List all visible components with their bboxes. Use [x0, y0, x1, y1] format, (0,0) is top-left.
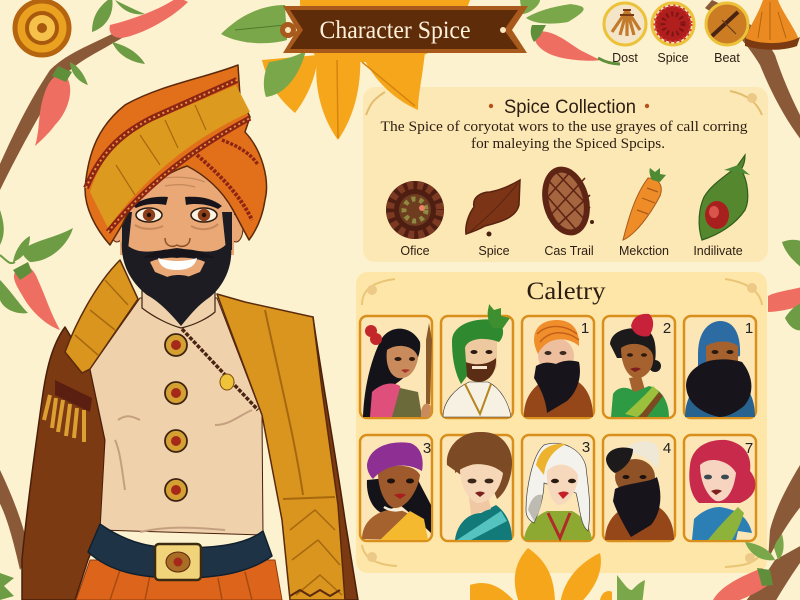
right of banner: chili and leaves	[520, 0, 620, 64]
panel: Caletry gallery	[356, 272, 767, 573]
fringe on arm	[44, 380, 92, 442]
card numbers: 2	[663, 320, 671, 337]
heading: Caletry	[526, 278, 606, 305]
eyes	[136, 208, 162, 222]
card numbers: 7	[745, 440, 753, 457]
panel: Spice Collection	[363, 87, 768, 262]
turban	[85, 65, 266, 245]
card 2: man with green turban	[441, 304, 513, 418]
panel: Spice Collection: for maleying the Spiced Spcips.	[471, 136, 665, 152]
right side chili and leaves	[768, 240, 800, 330]
face	[120, 165, 234, 255]
spice: Indilivate avocado	[693, 155, 750, 258]
description: The Spice of coryotat wors to the use grayes of call corring	[380, 119, 748, 135]
icon: Dost	[604, 3, 646, 65]
spice: Mekction carrot: Mekction	[619, 244, 669, 258]
card 8: woman with white hair and veil	[522, 435, 594, 541]
card 6: woman with purple headwrap	[360, 435, 432, 541]
chain with pendant	[182, 329, 258, 410]
nose	[165, 238, 190, 246]
botanical frame: top left branch, gear and chilies	[0, 0, 188, 190]
card 4: woman with red flower	[603, 314, 675, 418]
spice: Indilivate avocado: Indilivate	[693, 244, 743, 258]
card 3: man with orange turban and black beard	[522, 316, 594, 418]
turban braids	[86, 80, 237, 188]
top flower	[221, 0, 470, 140]
spice: Ofice	[386, 181, 444, 258]
botanical frame: left chili and leaves	[0, 210, 73, 330]
card 7: woman with brown curly hair	[441, 432, 513, 541]
icon: Spice	[652, 3, 694, 65]
card numbers: 1	[581, 320, 589, 337]
icon row: Dost, Spice, Beat	[604, 3, 748, 65]
card numbers: 3	[423, 440, 431, 457]
spice: Spice	[466, 180, 520, 258]
spice: Mekction carrot	[619, 168, 669, 258]
right sleeve	[290, 317, 358, 600]
buttons	[165, 334, 187, 501]
card numbers: 4	[663, 440, 671, 457]
card 10: woman with red hair	[684, 435, 756, 541]
belt	[88, 524, 272, 580]
icon: Spice: Spice	[657, 51, 689, 65]
left sleeve	[22, 327, 105, 600]
lower right branch, chili and leaves	[712, 465, 800, 600]
card numbers: 3	[582, 439, 590, 456]
card numbers: 1	[745, 320, 753, 337]
banner title: Character Spice	[320, 17, 470, 44]
right branch and decorated bag	[705, 0, 800, 145]
main character: turbaned man	[22, 65, 358, 600]
shirt	[90, 298, 263, 535]
spice: Cas Trail	[535, 161, 597, 258]
card numbers	[423, 320, 753, 457]
card 9: man with white turban and black beard	[603, 435, 675, 541]
scarf around neck	[65, 260, 138, 373]
ears	[110, 214, 243, 242]
beard and moustache	[122, 240, 231, 326]
botanical frame: lower left branch and leaf	[0, 470, 30, 600]
icon: Dost: Dost	[612, 51, 638, 65]
turban gold band	[90, 85, 250, 228]
spice: Spice: Spice	[478, 244, 510, 258]
eyebrows	[132, 197, 222, 209]
card 1: girl with flower and spear	[360, 316, 432, 418]
spice: Cas Trail: Cas Trail	[544, 244, 594, 258]
bottom flower	[470, 548, 645, 600]
card 5: man with blue turban and long beard	[684, 316, 756, 418]
spice: Ofice: Ofice	[400, 244, 430, 258]
icon: Beat	[706, 3, 748, 65]
icon: Beat: Beat	[714, 51, 740, 65]
banner: Character Spice	[280, 6, 528, 53]
collar	[142, 290, 215, 328]
sash pattern	[290, 510, 342, 595]
sash	[217, 294, 345, 600]
heading: Spice Collection	[504, 97, 636, 118]
skirt	[76, 560, 282, 600]
